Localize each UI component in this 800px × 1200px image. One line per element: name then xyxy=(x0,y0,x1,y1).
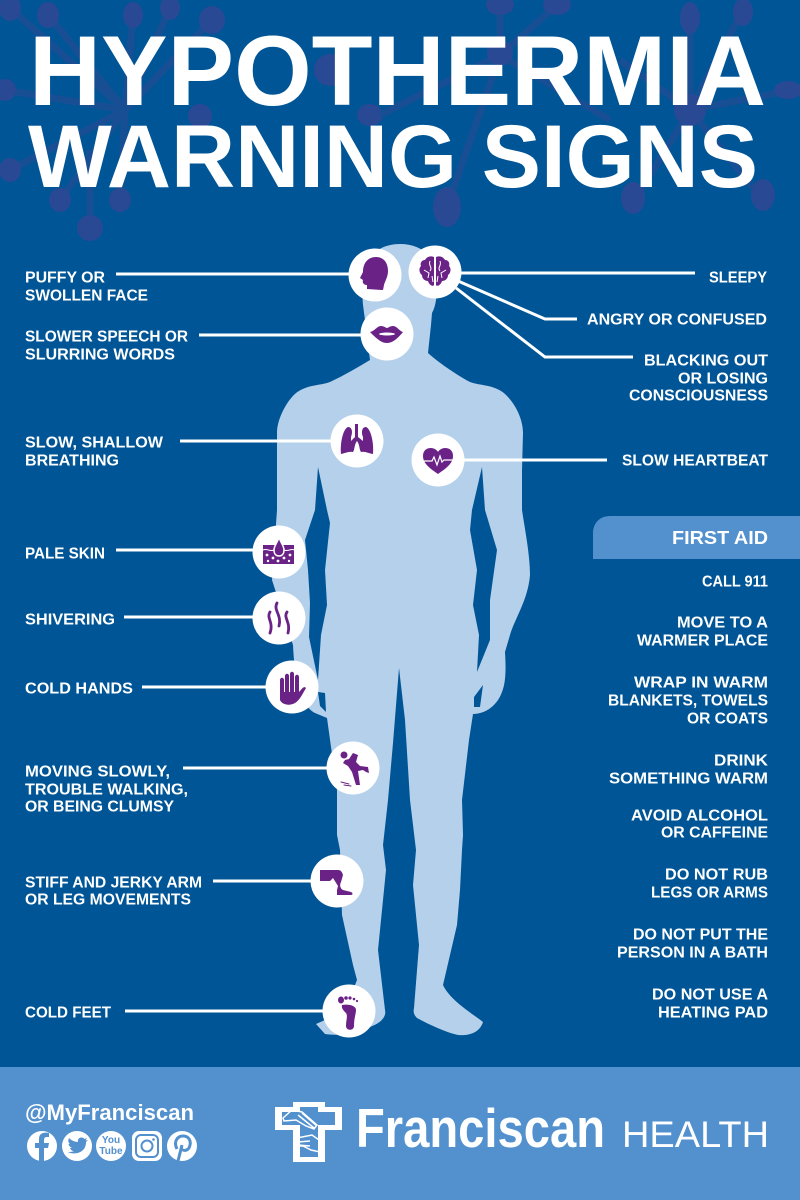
sign: puffy or swollen face: SWOLLEN FACE xyxy=(25,288,148,305)
first aid list: OR COATS xyxy=(687,711,768,728)
sign: shivering xyxy=(25,592,306,644)
sign: stiff and jerky movements: OR LEG MOVEMENTS xyxy=(25,892,191,909)
snowflake pattern xyxy=(0,0,800,241)
icon: brain xyxy=(408,246,462,298)
sign: moving slowly xyxy=(25,742,380,816)
human body silhouette xyxy=(272,244,530,1035)
sign: slow heartbeat: SLOW HEARTBEAT xyxy=(622,453,768,470)
sign: angry or confused: ANGRY OR CONFUSED xyxy=(587,312,767,329)
sign: sleepy: SLEEPY xyxy=(709,270,767,287)
sign: cold feet xyxy=(25,984,376,1038)
social media icons xyxy=(27,1131,197,1161)
title: WARNING SIGNS xyxy=(28,106,758,206)
first aid list: WRAP IN WARM xyxy=(634,675,768,692)
sign: blacking out: BLACKING OUT xyxy=(644,353,768,370)
first aid list: BLANKETS, TOWELS xyxy=(608,693,768,710)
sign: angry or confused xyxy=(458,281,767,329)
sign: blacking out xyxy=(456,288,768,405)
sign: slow shallow breathing: SLOW, SHALLOW xyxy=(25,435,164,452)
first aid list: DO NOT PUT THE xyxy=(633,927,768,944)
social media icons: You xyxy=(102,1135,120,1146)
sign: blacking out: OR LOSING xyxy=(678,371,768,388)
first aid heading xyxy=(593,516,800,559)
sign: cold feet: COLD FEET xyxy=(25,1005,111,1022)
sign: moving slowly: OR BEING CLUMSY xyxy=(25,799,174,816)
sign: pale skin: PALE SKIN xyxy=(25,546,105,563)
sign: cold hands: COLD HANDS xyxy=(25,681,133,698)
first aid list: OR CAFFEINE xyxy=(661,825,768,842)
first aid list: DRINK xyxy=(714,753,768,770)
sign: slower speech: SLURRING WORDS xyxy=(25,347,175,364)
social media icons: Tube xyxy=(99,1146,123,1157)
first aid list: PERSON IN A BATH xyxy=(617,945,768,962)
first aid list: DO NOT USE A xyxy=(652,987,768,1004)
first aid heading: FIRST AID xyxy=(672,528,768,548)
sign: blacking out: CONSCIOUSNESS xyxy=(629,388,768,405)
first aid list: DO NOT RUB xyxy=(665,867,768,884)
sign: slow shallow breathing: BREATHING xyxy=(25,453,119,470)
panel: first aid xyxy=(593,516,800,1022)
first aid list: LEGS OR ARMS xyxy=(651,885,768,902)
sign: stiff and jerky movements: STIFF AND JERKY ARM xyxy=(25,875,202,892)
sign: pale skin xyxy=(25,526,306,578)
title: HYPOTHERMIA xyxy=(29,15,766,126)
sign: slower speech: SLOWER SPEECH OR xyxy=(25,329,188,346)
sign: slow shallow breathing xyxy=(25,414,384,470)
logo cross xyxy=(275,1102,342,1162)
first aid list: HEATING PAD xyxy=(658,1005,768,1022)
sign: puffy or swollen face: PUFFY OR xyxy=(25,270,105,287)
first aid list: SOMETHING WARM xyxy=(609,771,768,788)
logo wordmark: Franciscan xyxy=(356,1097,605,1159)
title xyxy=(28,15,766,206)
sign: slower speech xyxy=(25,308,414,364)
sign: puffy or swollen face xyxy=(25,248,402,305)
sign: stiff and jerky movements xyxy=(25,854,364,909)
first aid list xyxy=(608,574,768,1022)
first aid list: CALL 911 xyxy=(702,574,768,591)
sign: cold hands xyxy=(25,660,318,714)
sign: slow heartbeat xyxy=(412,434,768,486)
sign: moving slowly: MOVING SLOWLY, xyxy=(25,764,170,781)
first aid list: MOVE TO A xyxy=(677,615,768,632)
logo: Franciscan Health xyxy=(275,1097,769,1162)
first aid list: WARMER PLACE xyxy=(637,633,768,650)
sign: moving slowly: TROUBLE WALKING, xyxy=(25,782,188,799)
footer band xyxy=(0,1067,800,1200)
first aid list: AVOID ALCOHOL xyxy=(631,808,768,825)
sign: shivering: SHIVERING xyxy=(25,612,115,629)
logo descriptor: HEALTH xyxy=(622,1114,769,1155)
social handle: @MyFranciscan xyxy=(25,1100,194,1125)
